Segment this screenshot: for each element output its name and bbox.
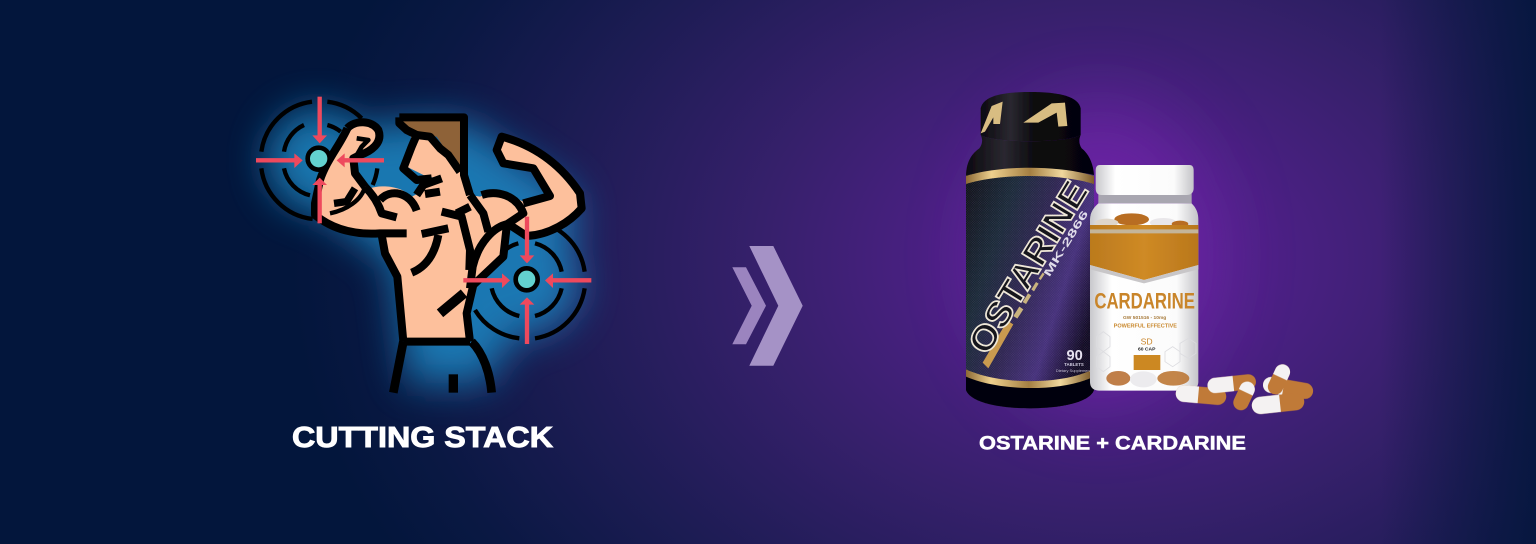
capsules in jar top [1095, 213, 1188, 227]
caption: ostarine + cardarine: OSTARINE + CARDARINE [979, 432, 1246, 454]
product: ostarine bottle [961, 92, 1096, 408]
gold diagonal stripe [983, 321, 1013, 368]
product name: OSTARINE [961, 174, 1096, 361]
product: cardarine jar [1090, 165, 1198, 391]
muscle and body outlines [315, 117, 582, 393]
target rings: arm [261, 102, 585, 338]
dosage line: GW 501516 - 10mg [1123, 315, 1166, 321]
product subtitle: MK-2866 [1042, 209, 1091, 279]
orange label band [1090, 225, 1198, 280]
tablet count: 90 [1067, 348, 1083, 364]
product name: CARDARINE [1094, 289, 1195, 314]
tablet label: TABLETS [1064, 362, 1084, 367]
bottle shoulder [966, 135, 1094, 175]
capsules in jar bottom [1106, 371, 1189, 387]
target center: hip [516, 268, 538, 290]
arrow: double chevron [732, 246, 803, 366]
bottle base [966, 373, 1094, 408]
body fill [315, 123, 581, 342]
loose capsules [1175, 362, 1314, 415]
purple glow behind bottles [985, 105, 1215, 405]
gold bands [966, 168, 1094, 184]
blue glow behind icon [268, 110, 579, 380]
jar cap [1096, 165, 1194, 195]
target rings: hip [542, 223, 585, 272]
red arrows: arm [256, 97, 384, 223]
heading: cutting stack: CUTTING STACK [292, 422, 553, 454]
bottle body [966, 169, 1094, 408]
product group [961, 92, 1314, 415]
orange square [1134, 355, 1160, 370]
icon: muscular man with target markers [256, 97, 591, 393]
cap logo marks [981, 102, 1067, 133]
jar body [1090, 203, 1198, 391]
bottle cap [981, 92, 1081, 141]
supplement label: Dietary Supplement [1056, 368, 1092, 373]
target center: arm [308, 148, 330, 170]
capsule count: 60 CAP [1138, 347, 1156, 353]
tagline: POWERFUL EFFECTIVE [1114, 324, 1177, 330]
honeycomb pattern [1097, 332, 1196, 372]
brand mark: SD [1141, 336, 1153, 346]
hair [399, 117, 464, 170]
jar neck [1098, 193, 1192, 203]
red arrows: hip [463, 217, 591, 344]
